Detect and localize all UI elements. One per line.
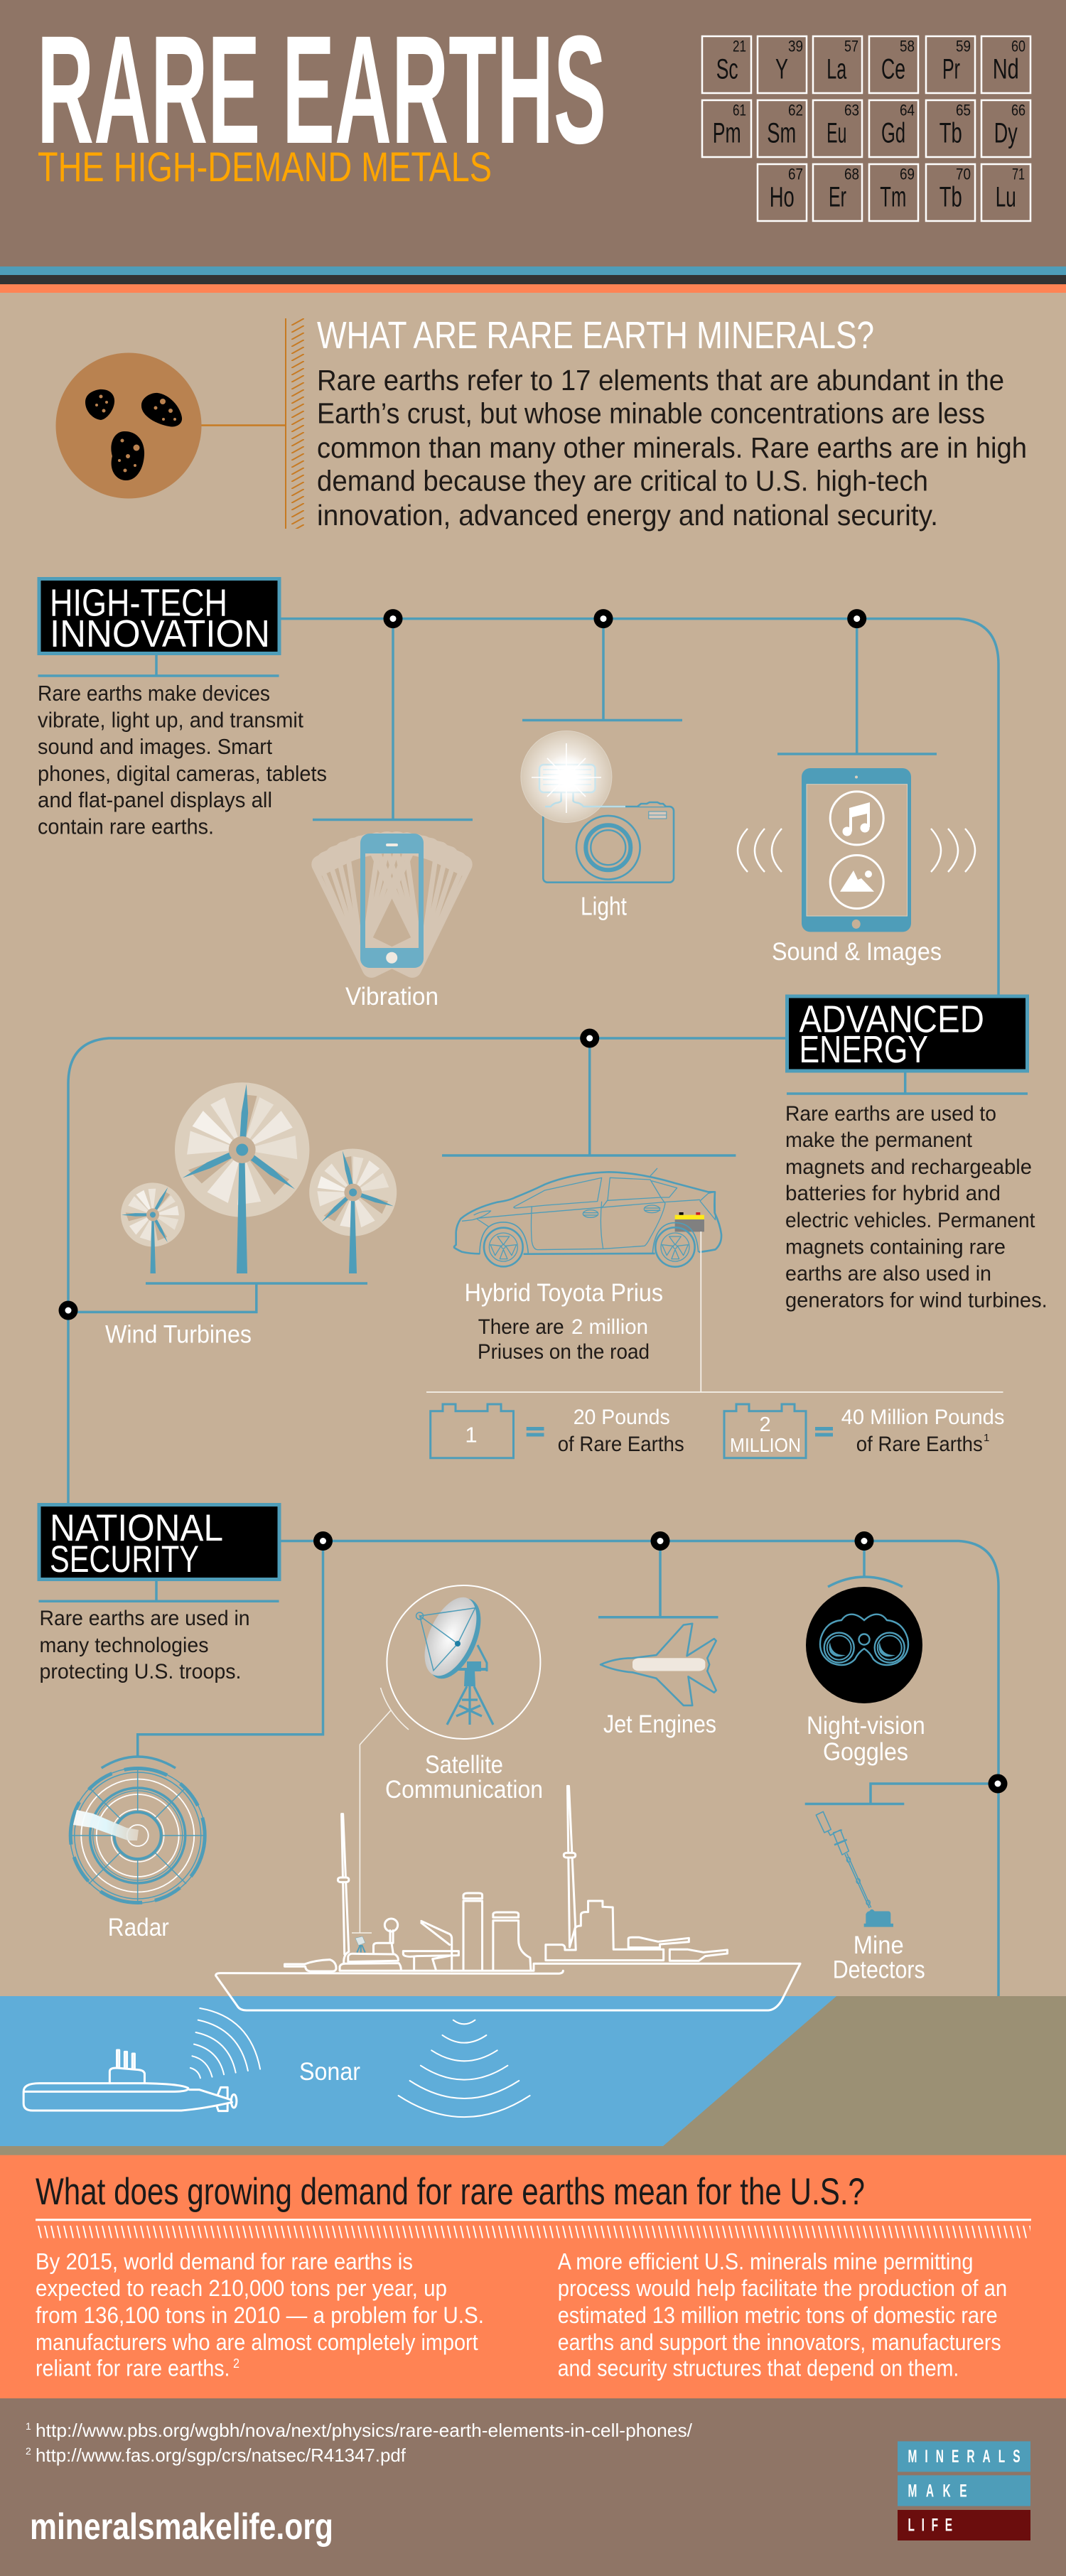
label: mine detectors: Detectors [833, 1956, 925, 1984]
periodic table of rare earths: 71 [1012, 166, 1025, 183]
prius statistic: Priuses on the road [478, 1340, 650, 1364]
periodic table of rare earths: Dy [994, 118, 1018, 149]
header band [0, 0, 1066, 293]
periodic table of rare earths: Sm [767, 118, 796, 149]
website: mineralsmakelife.org [30, 2506, 333, 2548]
periodic table of rare earths: 70 [956, 166, 971, 183]
footnotes: 1 [26, 2420, 31, 2432]
connector: national security route [38, 1531, 1008, 1996]
periodic table of rare earths: 64 [900, 102, 915, 119]
high-tech description: contain rare earths. [38, 814, 214, 839]
icon: hybrid car with battery [453, 1168, 721, 1267]
high-tech description: phones, digital cameras, tablets [38, 762, 327, 786]
heading box: advanced energy: ENERGY [799, 1028, 928, 1071]
footnotes: 2 [26, 2445, 31, 2457]
logo: minerals make life [898, 2441, 1030, 2540]
prius statistic [478, 1315, 650, 1364]
logo: minerals make life: MAKE [908, 2481, 967, 2501]
advanced energy description: batteries for hybrid and [785, 1182, 1001, 1205]
icon: camera with flash [521, 731, 674, 883]
advanced energy description: magnets and rechargeable [785, 1155, 1032, 1179]
periodic table of rare earths: Pm [713, 118, 741, 149]
label: night-vision goggles: Night-vision [807, 1712, 925, 1740]
label: vibration: Vibration [345, 983, 438, 1011]
icon: night-vision binoculars [806, 1587, 922, 1703]
icon: submarine [23, 2008, 260, 2111]
left column text [36, 2249, 484, 2381]
label: mine detectors [833, 1931, 925, 1984]
right column text: process would help facilitate the production of an [558, 2275, 1007, 2301]
water and seabed [0, 1996, 1066, 2155]
high-tech description: vibrate, light up, and transmit [38, 708, 303, 733]
label: hybrid toyota prius: Hybrid Toyota Prius [465, 1279, 663, 1307]
intro paragraph: demand because they are critical to U.S. high-tech [317, 465, 928, 497]
icon: 2 million batteries equal 40 million pounds: 40 Million Pounds [841, 1406, 1004, 1429]
prius statistic: 2 million [571, 1315, 648, 1339]
heading: growing demand: What does growing demand for rare earths mean for the U.S.? [36, 2171, 865, 2213]
right column text: A more efficient U.S. minerals mine permitting [558, 2249, 973, 2275]
label: satellite communication: Satellite [425, 1751, 503, 1779]
icon: 2 million batteries equal 40 million pounds: 1 [984, 1432, 989, 1444]
footnotes: http://www.fas.org/sgp/crs/natsec/R41347.pdf [36, 2445, 407, 2466]
right column text: estimated 13 million metric tons of domestic rare [558, 2302, 998, 2328]
icon: radar [69, 1767, 206, 1904]
icon: 2 million batteries equal 40 million pounds [724, 1404, 1004, 1458]
icon: 2 million batteries equal 40 million pounds: of Rare Earths [856, 1433, 983, 1456]
icon: single battery equals 20 pounds: of Rare Earths [558, 1433, 684, 1456]
high-tech description [38, 681, 327, 839]
periodic table of rare earths: 62 [788, 102, 803, 119]
periodic table of rare earths: Tm [880, 182, 906, 213]
icon: wind turbines [110, 1082, 408, 1273]
heading box: advanced energy [787, 996, 1028, 1071]
label: light: Light [581, 891, 627, 920]
panel: what growing demand means [0, 2155, 1066, 2398]
left column text: expected to reach 210,000 tons per year, up [36, 2275, 447, 2301]
label: wind turbines: Wind Turbines [105, 1321, 252, 1349]
periodic table of rare earths: 21 [733, 38, 746, 55]
icon: satellite dish [352, 1585, 540, 1933]
right column text [558, 2249, 1007, 2381]
periodic table of rare earths: Ho [770, 182, 795, 213]
periodic table of rare earths: Tb [940, 118, 962, 149]
footnotes [26, 2420, 693, 2466]
connector: high-tech route [38, 609, 998, 995]
icon: vibrating phone [308, 830, 475, 981]
periodic table of rare earths: 63 [844, 102, 859, 119]
icon: battleship [216, 1786, 800, 2010]
periodic table of rare earths: 67 [788, 166, 803, 183]
periodic table of rare earths: 66 [1011, 102, 1025, 119]
prius statistic: There are [478, 1315, 564, 1339]
periodic table of rare earths: Ce [881, 54, 905, 85]
periodic table of rare earths: Eu [827, 118, 846, 149]
intro paragraph: innovation, advanced energy and national security. [317, 499, 938, 532]
periodic table of rare earths: Er [829, 182, 846, 213]
periodic table of rare earths [702, 36, 1030, 221]
advanced energy description: make the permanent [785, 1128, 973, 1152]
periodic table of rare earths: 65 [956, 102, 971, 119]
national security description: protecting U.S. troops. [40, 1660, 242, 1683]
right column text: earths and support the innovators, manufacturers [558, 2329, 1001, 2355]
icon: mine detector [816, 1811, 893, 1927]
logo: minerals make life: LIFE [908, 2516, 952, 2535]
national security description [40, 1607, 250, 1683]
icon: mineral rock sample [55, 318, 304, 529]
subtitle: THE HIGH-DEMAND METALS [38, 144, 492, 190]
label: night-vision goggles [807, 1712, 925, 1766]
battery callout line [426, 1232, 1003, 1392]
periodic table of rare earths: Tb [940, 182, 962, 213]
periodic table of rare earths: Y [775, 54, 788, 85]
icon: 2 million batteries equal 40 million pounds: 2 [760, 1413, 771, 1436]
advanced energy description: Rare earths are used to [785, 1102, 996, 1126]
periodic table of rare earths: 61 [733, 102, 746, 119]
periodic table of rare earths: 39 [788, 38, 803, 55]
icon: single battery equals 20 pounds: 20 Pounds [574, 1406, 670, 1429]
label: sonar: Sonar [299, 2058, 360, 2086]
left column text: 2 [233, 2356, 239, 2371]
intro paragraph: Earth’s crust, but whose minable concentrations are less [317, 397, 985, 429]
periodic table of rare earths: Lu [996, 182, 1016, 213]
national security description: many technologies [40, 1634, 209, 1657]
left column text: reliant for rare earths. [36, 2356, 230, 2381]
right column text: and security structures that depend on them. [558, 2356, 959, 2381]
heading box: high-tech innovation: HIGH-TECH [50, 581, 227, 624]
icon: ship sonar waves [399, 2020, 530, 2117]
heading box: national security: SECURITY [50, 1538, 199, 1580]
label: mine detectors: Mine [854, 1931, 904, 1959]
icon: single battery equals 20 pounds: 1 [465, 1423, 478, 1447]
national security description: Rare earths are used in [40, 1607, 250, 1630]
connector: advanced energy route [58, 1029, 1028, 1503]
advanced energy description: earths are also used in [785, 1262, 991, 1286]
periodic table of rare earths: Gd [881, 118, 905, 149]
logo: minerals make life: MINERALS [908, 2447, 1021, 2467]
heading box: national security: NATIONAL [50, 1507, 223, 1549]
label: satellite communication: Communication [385, 1776, 543, 1804]
footer band [0, 2398, 1066, 2576]
label: sound and images: Sound & Images [772, 938, 942, 966]
label: satellite communication [385, 1751, 543, 1804]
periodic table of rare earths: Nd [993, 54, 1019, 85]
advanced energy description [785, 1102, 1048, 1313]
left column text: By 2015, world demand for rare earths is [36, 2249, 413, 2275]
footnotes: http://www.pbs.org/wgbh/nova/next/physics/rare-earth-elements-in-cell-phones/ [36, 2420, 693, 2441]
periodic table of rare earths: 57 [844, 38, 858, 55]
icon: 2 million batteries equal 40 million pounds: MILLION [730, 1434, 801, 1456]
heading box: national security [39, 1505, 279, 1580]
periodic table of rare earths: Pr [942, 54, 960, 85]
label: night-vision goggles: Goggles [823, 1738, 908, 1766]
heading box: high-tech innovation: INNOVATION [50, 613, 270, 655]
icon: tablet with sound waves [738, 768, 975, 932]
periodic table of rare earths: La [827, 54, 847, 85]
label: radar: Radar [108, 1914, 169, 1941]
icon: jet [601, 1624, 716, 1705]
periodic table of rare earths: 60 [1011, 38, 1025, 55]
heading: what are rare earth minerals: WHAT ARE RARE EARTH MINERALS? [317, 314, 874, 357]
periodic table of rare earths: 69 [900, 166, 915, 183]
periodic table of rare earths: 58 [900, 38, 915, 55]
periodic table of rare earths: 68 [844, 166, 859, 183]
high-tech description: sound and images. Smart [38, 735, 272, 759]
high-tech description: and flat-panel displays all [38, 788, 272, 812]
advanced energy description: electric vehicles. Permanent [785, 1209, 1035, 1232]
periodic table of rare earths: 59 [956, 38, 971, 55]
left column text: from 136,100 tons in 2010 — a problem for U.S. [36, 2302, 484, 2328]
intro paragraph: Rare earths refer to 17 elements that are abundant in the [317, 364, 1004, 397]
label: jet engines: Jet Engines [603, 1710, 716, 1738]
icon: single battery equals 20 pounds [431, 1404, 684, 1458]
advanced energy description: generators for wind turbines. [785, 1289, 1048, 1313]
advanced energy description: magnets containing rare [785, 1236, 1006, 1259]
intro paragraph: common than many other minerals. Rare earths are in high [317, 431, 1027, 464]
intro paragraph [317, 364, 1027, 532]
high-tech description: Rare earths make devices [38, 681, 270, 706]
periodic table of rare earths: Sc [716, 54, 738, 85]
heading box: advanced energy: ADVANCED [799, 998, 984, 1041]
left column text: manufacturers who are almost completely import [36, 2329, 478, 2355]
heading box: high-tech innovation [39, 578, 279, 655]
